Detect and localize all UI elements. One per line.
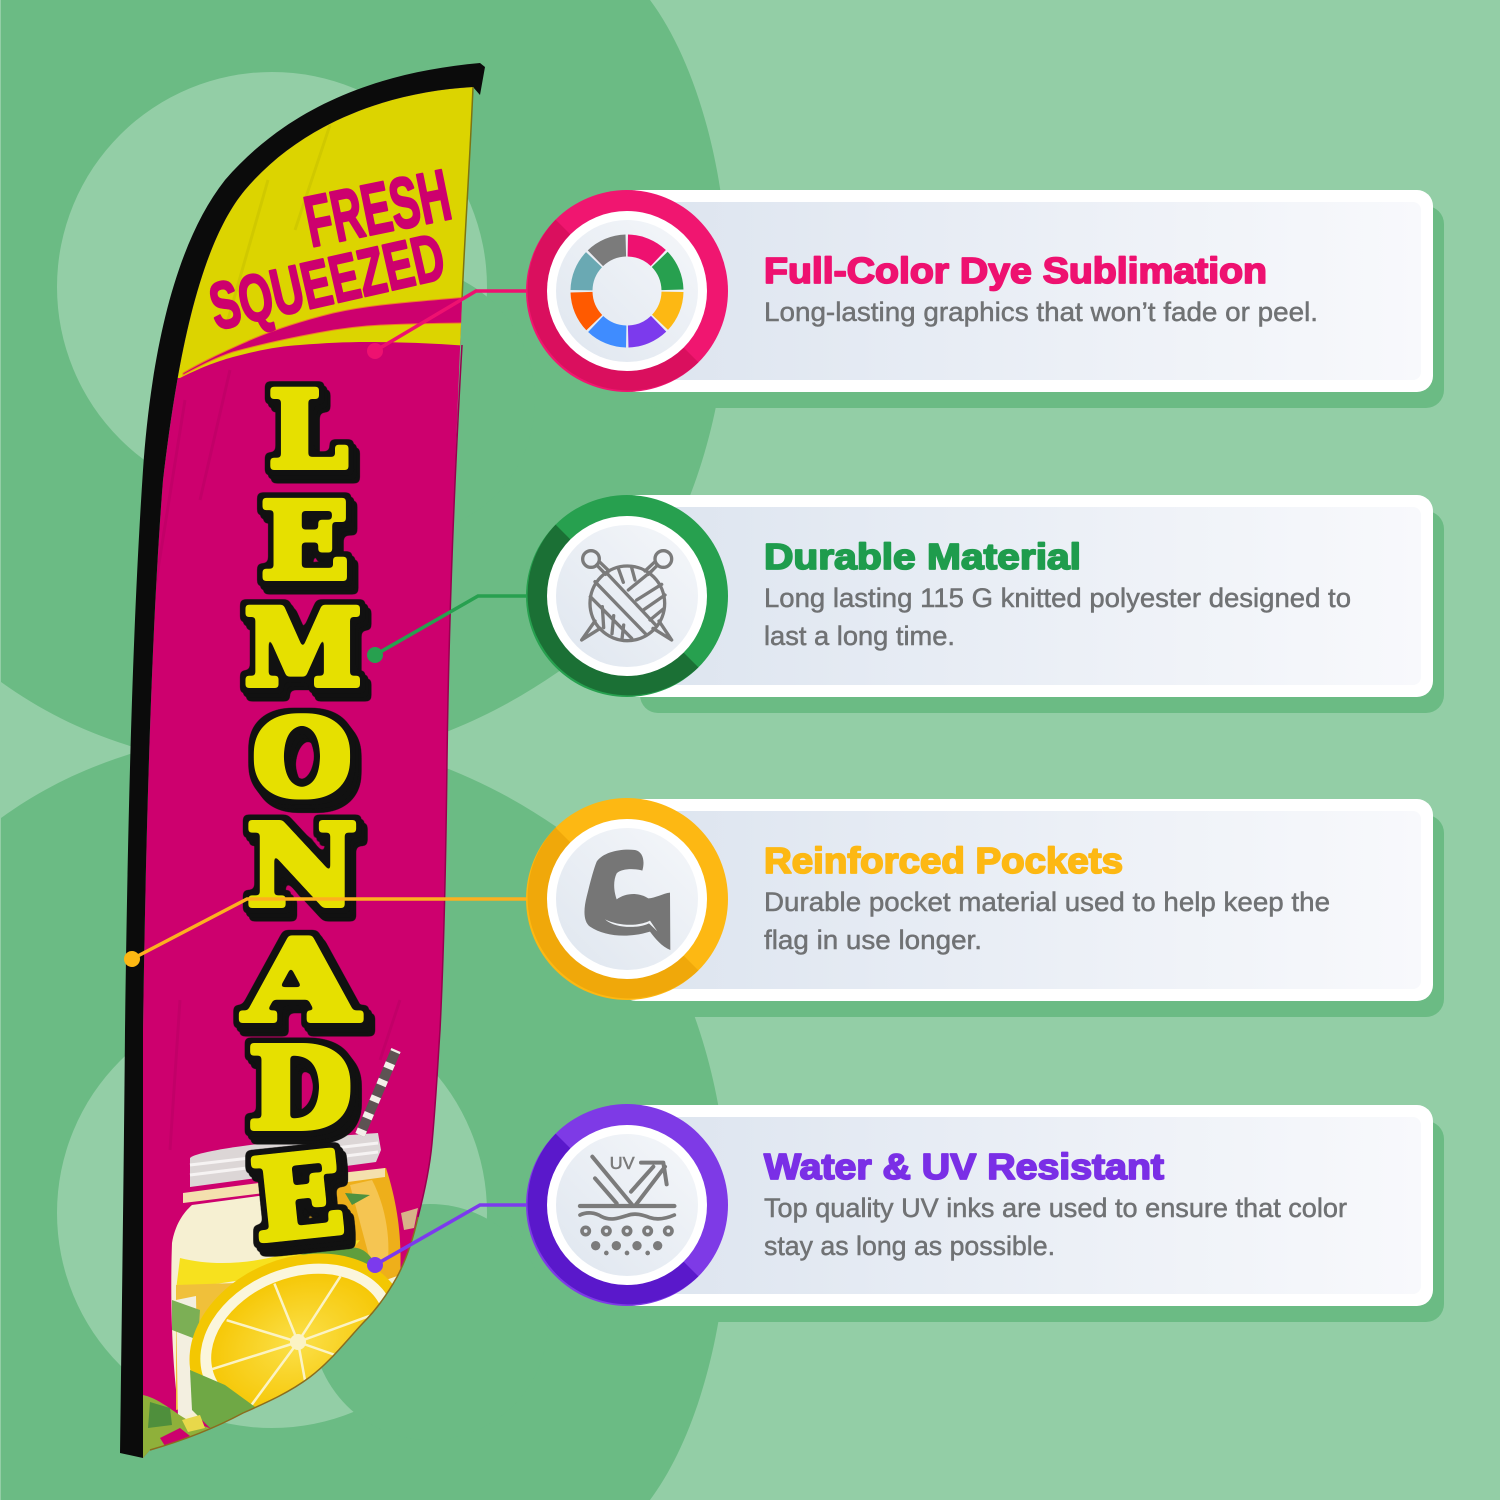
icon: flexed arm <box>584 850 670 950</box>
description: flag in use longer. <box>764 925 982 955</box>
icon: colour wheel <box>563 227 691 355</box>
jar handle <box>401 1208 418 1230</box>
description: last a long time. <box>764 621 955 651</box>
LEMONADE letters: O <box>252 695 352 820</box>
black pole sleeve <box>120 63 485 1458</box>
connector: yellow <box>124 899 530 967</box>
LEMONADE letters: A <box>242 916 362 1047</box>
FRESH SQUEEZED text: FRESH <box>298 155 457 263</box>
description: stay as long as possible. <box>764 1231 1055 1261</box>
bottom leaves <box>190 1370 262 1428</box>
FRESH SQUEEZED text <box>203 155 457 344</box>
magenta swoosh <box>183 297 470 375</box>
connector: pink <box>367 291 530 359</box>
LEMONADE letters: N <box>246 801 358 932</box>
card 1: dye sublimation <box>620 190 1444 408</box>
card 3: reinforced pockets <box>620 799 1444 1017</box>
icon: yarn ball and needles <box>582 551 672 641</box>
LEMONADE letters: E <box>260 478 350 603</box>
flag yellow top section <box>178 87 472 378</box>
card 2: durable material <box>620 495 1444 713</box>
description <box>764 1193 1347 1261</box>
flag fabric: magenta body <box>143 87 472 1458</box>
connector: purple <box>367 1205 530 1273</box>
lemon slice <box>190 1254 392 1407</box>
jar lid <box>190 1133 381 1187</box>
description: Top quality UV inks are used to ensure that color <box>764 1193 1347 1223</box>
LEMONADE letters: E <box>246 1128 350 1268</box>
flag <box>120 60 500 1470</box>
LEMONADE letters: L <box>268 367 348 492</box>
card 4: water and UV <box>620 1105 1444 1322</box>
description: Long lasting 115 G knitted polyester designed to <box>764 583 1351 613</box>
badge 3: muscle <box>526 798 728 1000</box>
description: Long-lasting graphics that won’t fade or peel. <box>764 297 1318 327</box>
description <box>764 887 1330 955</box>
description: Durable pocket material used to help keep the <box>764 887 1330 917</box>
leaves on jar <box>300 1248 372 1264</box>
heading: Full-Color Dye Sublimation <box>764 250 1267 291</box>
fabric wrinkles <box>150 125 400 1150</box>
FRESH SQUEEZED text: SQUEEZED <box>203 219 451 344</box>
heading: Water & UV Resistant <box>764 1146 1164 1187</box>
icon: UV protection: UV <box>610 1153 635 1173</box>
description <box>764 583 1351 651</box>
badge 4: UV <box>526 1104 728 1306</box>
badge 1: colour wheel <box>526 190 728 392</box>
heading: Reinforced Pockets <box>764 840 1123 881</box>
LEMONADE letters: M <box>244 585 362 710</box>
flag edge <box>150 87 473 1450</box>
LEMONADE letters <box>242 367 362 1268</box>
straw <box>360 1050 396 1135</box>
jar <box>143 1133 433 1465</box>
icon: UV protection <box>580 1153 674 1255</box>
connector: green <box>367 596 530 663</box>
heading: Durable Material <box>764 536 1081 577</box>
LEMONADE letters: D <box>248 1024 352 1155</box>
badge 2: yarn <box>526 495 728 697</box>
